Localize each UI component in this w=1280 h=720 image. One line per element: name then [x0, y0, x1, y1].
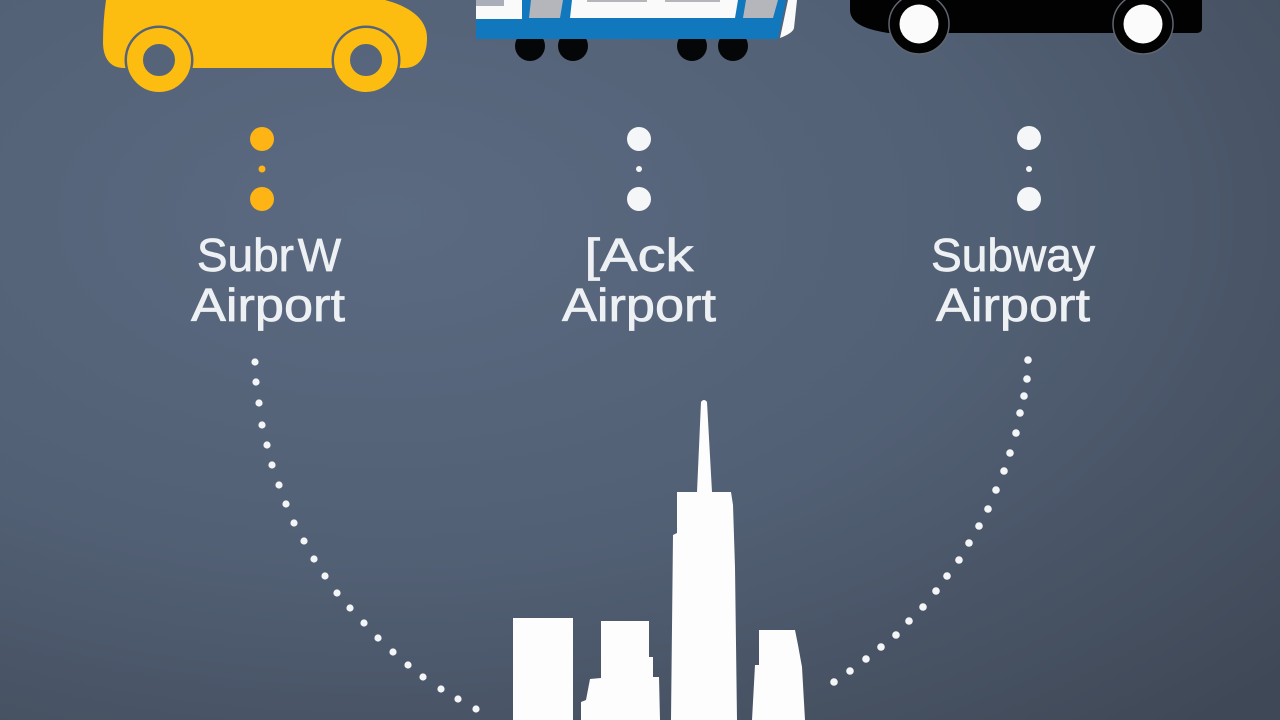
connector dots: white middle: [627, 127, 651, 211]
label: middle: [562, 229, 716, 331]
connector dots: yellow: [250, 127, 274, 211]
label: right: [931, 229, 1095, 331]
dotted arc: left: [251, 358, 480, 713]
label: right: Subway: [931, 229, 1095, 281]
label: middle: Airport: [562, 279, 716, 331]
skyline: [513, 400, 805, 720]
icon: blue and white bus: [476, 0, 797, 61]
label: right: Airport: [936, 279, 1090, 331]
label: middle: [Ack: [584, 229, 695, 281]
label: left: Subr W: [197, 229, 342, 281]
icon: black car: [850, 0, 1202, 54]
label: left: [191, 229, 345, 331]
label: left: Airport: [191, 279, 345, 331]
connector dots: white right: [1017, 126, 1041, 211]
icon: yellow car: [103, 0, 427, 84]
dotted arc: right: [830, 356, 1032, 686]
